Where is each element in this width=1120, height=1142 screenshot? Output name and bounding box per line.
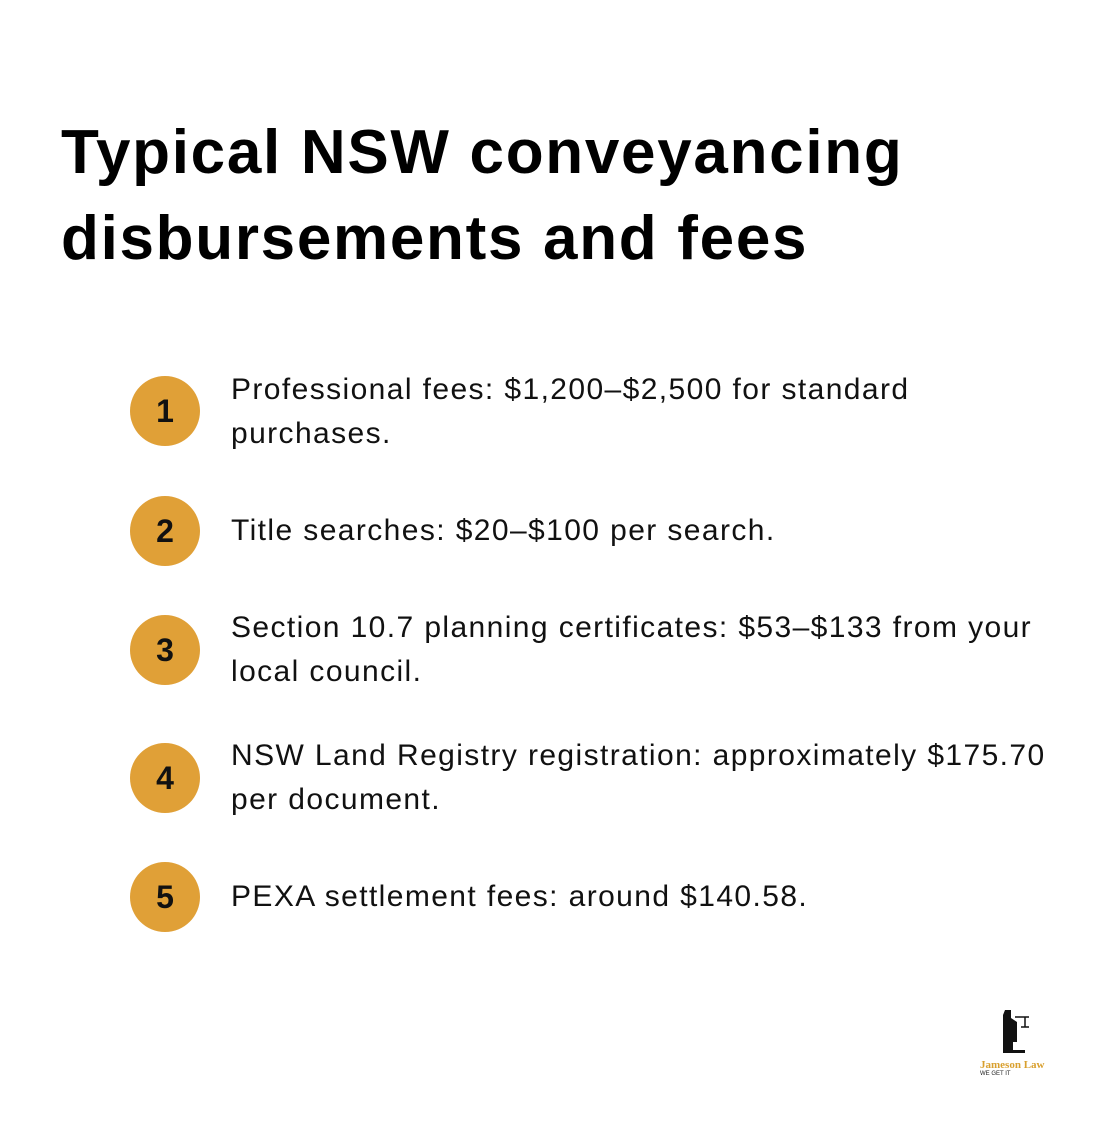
logo (980, 1010, 1044, 1077)
item 4: per document. (231, 783, 441, 816)
item 1: purchases. (231, 417, 392, 450)
item 1 (130, 373, 909, 450)
item 1: Professional fees: $1,200–$2,500 for standard (231, 373, 909, 406)
item 4: 4 (156, 760, 174, 796)
title: Typical NSW conveyancing (61, 118, 903, 187)
logo: WE GET IT (980, 1071, 1011, 1077)
title: disbursements and fees (61, 204, 808, 273)
item 2: Title searches: $20–$100 per search. (231, 514, 776, 547)
logo: Jameson Law (980, 1059, 1044, 1071)
item 2: 2 (156, 513, 174, 549)
item 1: 1 (156, 393, 174, 429)
item 5: 5 (156, 879, 174, 915)
item 3: local council. (231, 655, 422, 688)
item 5 (130, 862, 808, 932)
item 2 (130, 496, 776, 566)
item 4 (130, 739, 1046, 816)
item 3: 3 (156, 632, 174, 668)
item 3: Section 10.7 planning certificates: $53–$133 from your (231, 611, 1032, 644)
item 5: PEXA settlement fees: around $140.58. (231, 880, 808, 913)
title (61, 118, 903, 273)
item 4: NSW Land Registry registration: approximately $175.70 (231, 739, 1046, 772)
item 3 (130, 611, 1032, 688)
